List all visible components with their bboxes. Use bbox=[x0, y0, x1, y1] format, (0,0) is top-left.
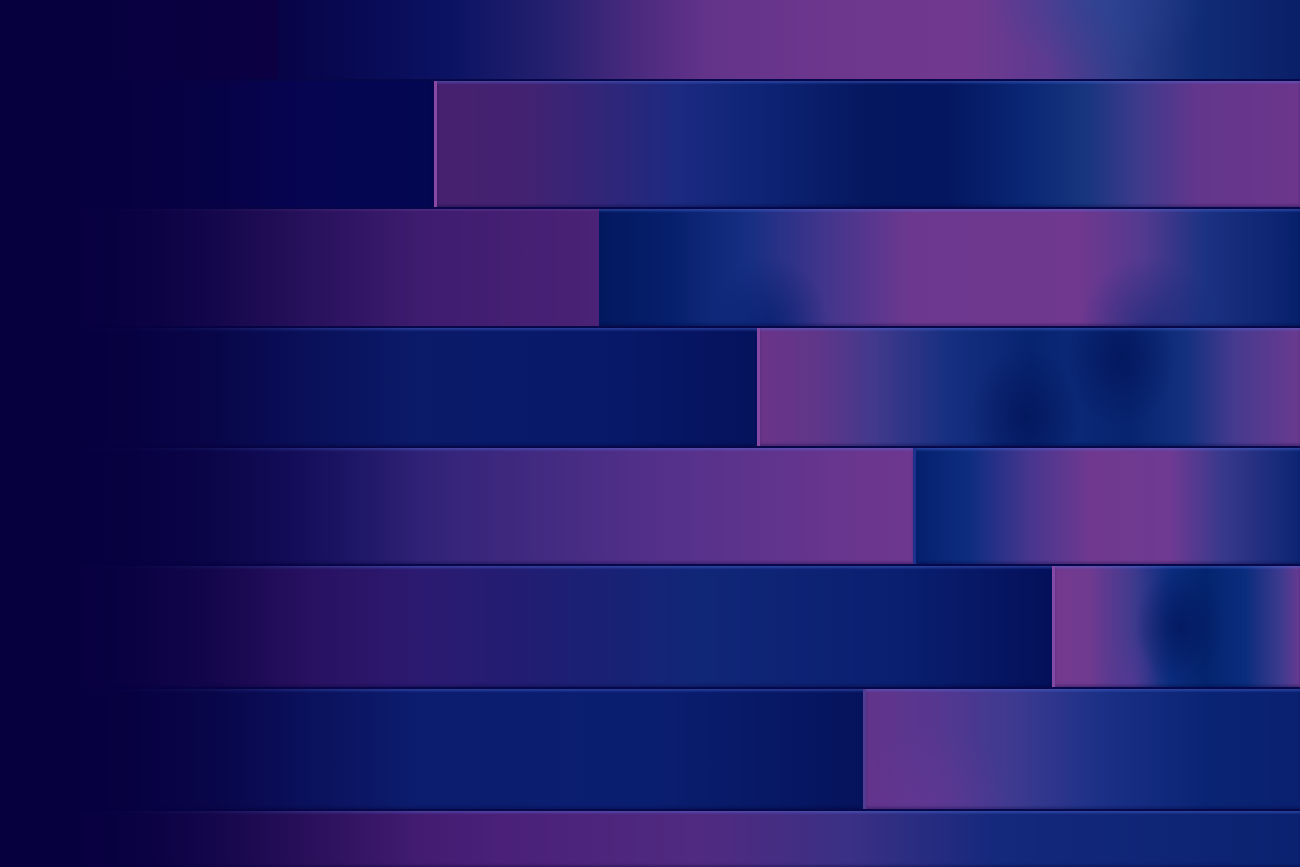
row 4 left bar bbox=[0, 328, 757, 446]
row 4 right bar bbox=[757, 328, 1300, 446]
row 7 right bar bbox=[863, 689, 1300, 809]
left dark fade overlay bbox=[0, 0, 420, 867]
row 7 left bar bbox=[0, 689, 863, 809]
row 1 right bar bbox=[278, 0, 1300, 79]
row 6 right bar bbox=[1052, 566, 1300, 687]
row 2 right bar bbox=[434, 81, 1300, 207]
row 6 left bar bbox=[0, 566, 1052, 687]
row 2 left bar bbox=[0, 81, 434, 207]
row 5 right bar bbox=[913, 448, 1300, 564]
row 5 left bar bbox=[0, 448, 913, 564]
row 1 left bar bbox=[0, 0, 278, 79]
row 3 left bar bbox=[0, 209, 599, 326]
row 3 right bar bbox=[599, 209, 1300, 326]
row 8 bar bbox=[0, 811, 1300, 867]
